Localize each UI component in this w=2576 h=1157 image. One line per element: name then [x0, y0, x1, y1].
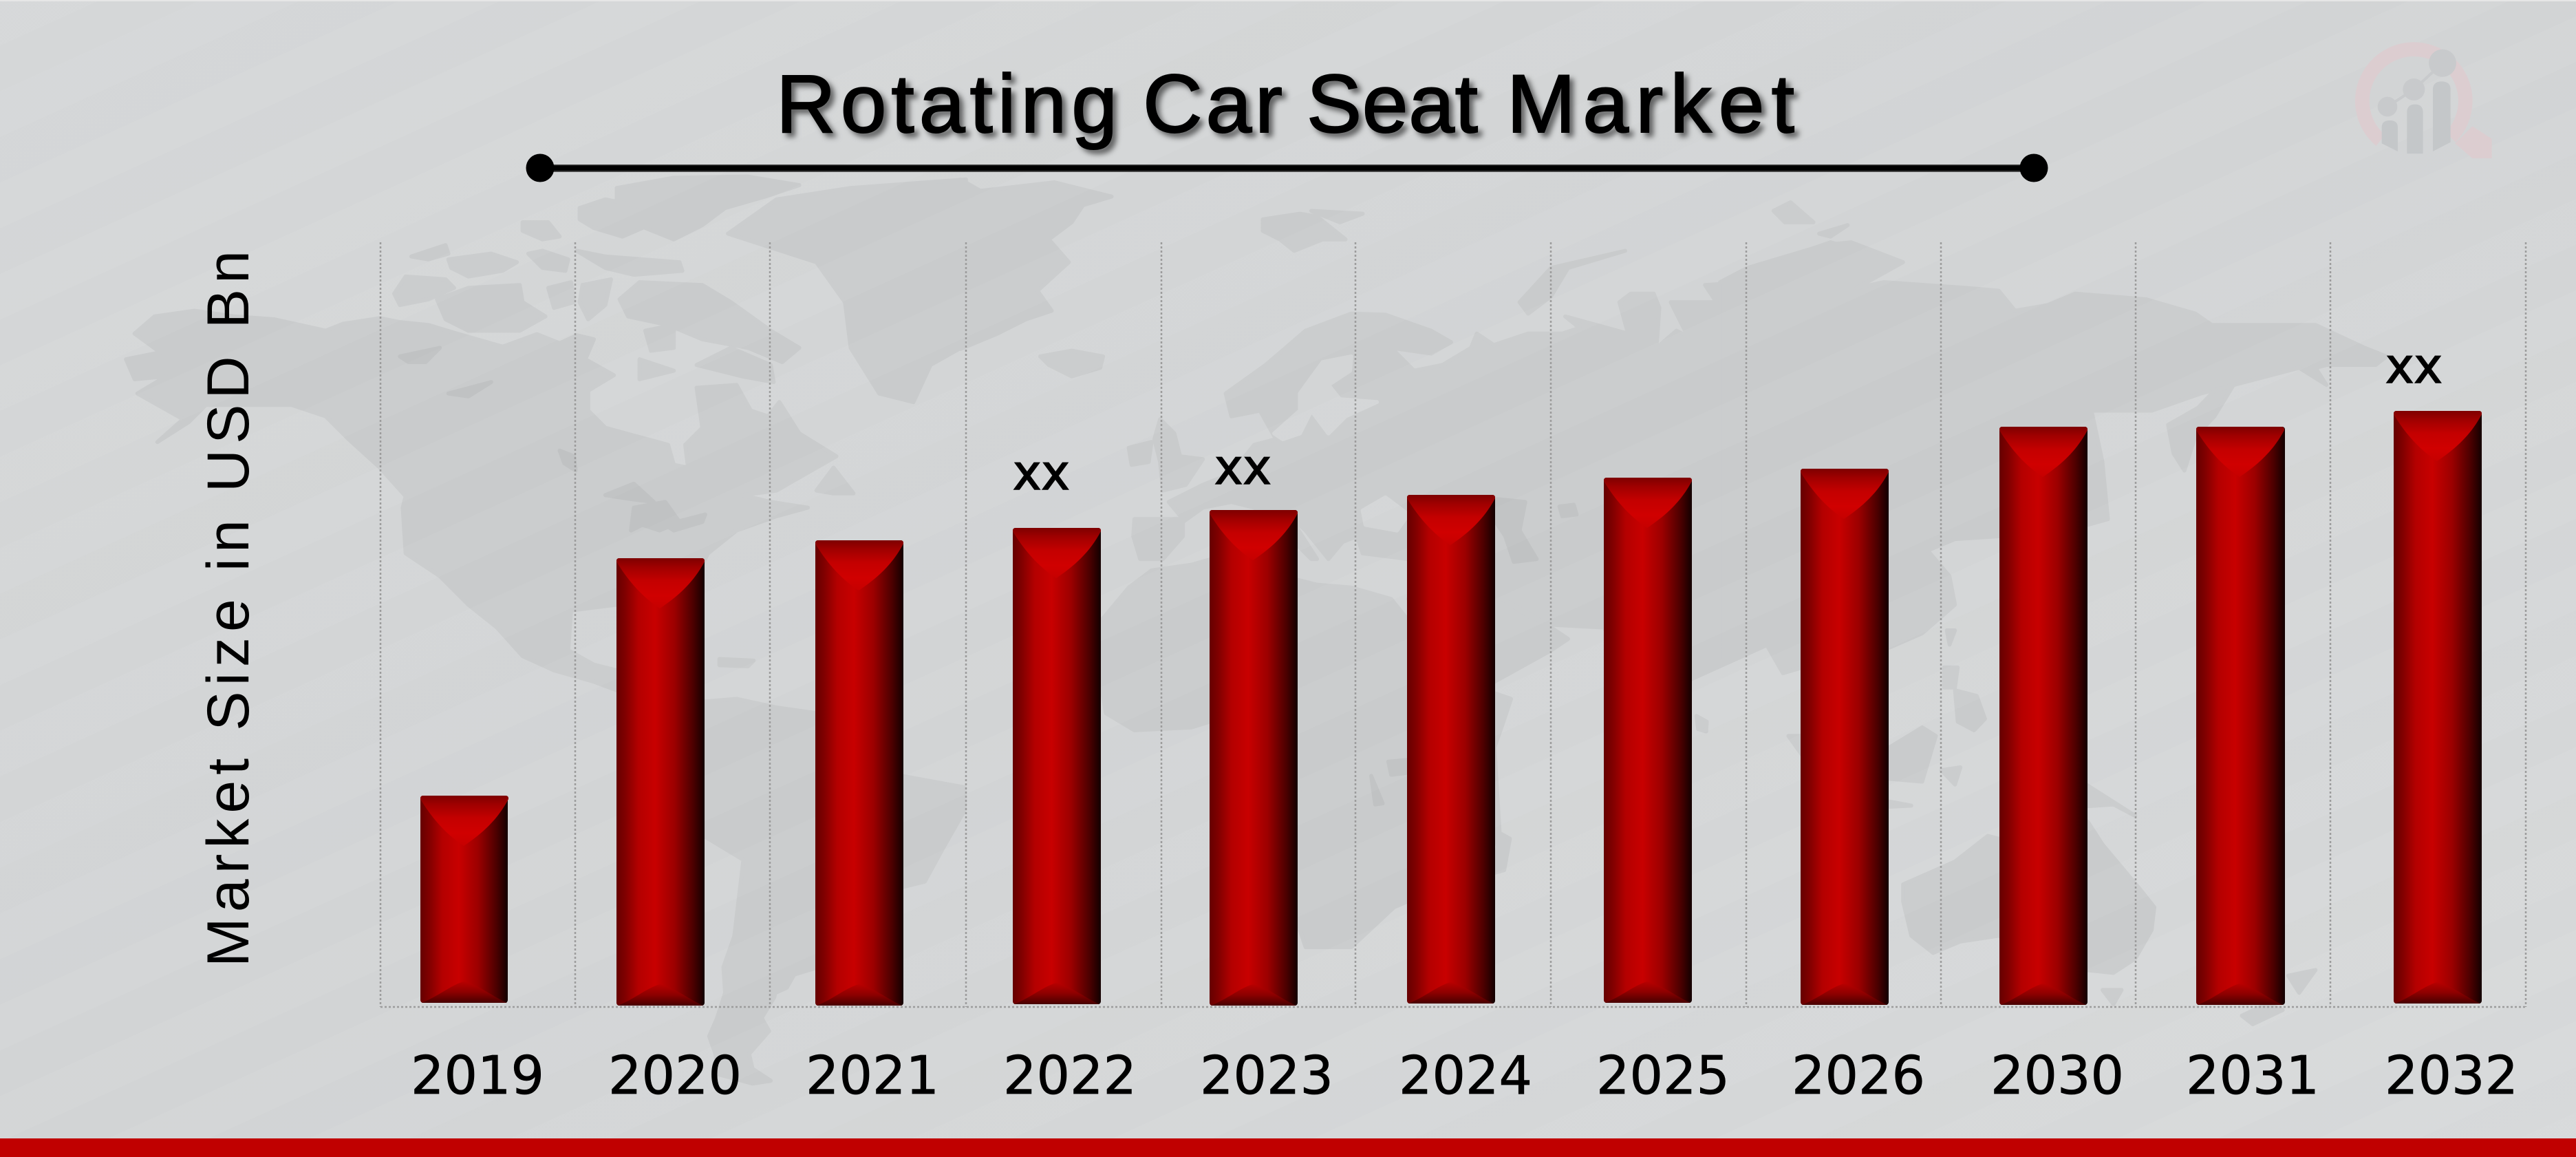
x axis year labels	[411, 1045, 2518, 1107]
value label 2032: xx	[2385, 338, 2443, 394]
bar 2025	[1604, 478, 1692, 1003]
title	[776, 58, 1794, 150]
x axis year labels: 2022	[1003, 1045, 1137, 1107]
title: Seat	[1307, 58, 1478, 150]
top edge	[0, 0, 2576, 1]
bar 2020	[616, 558, 705, 1006]
x axis year labels: 2025	[1596, 1045, 1730, 1107]
y axis label: Market Size in USD Bn	[195, 251, 261, 967]
bar 2021	[815, 540, 903, 1006]
bar 2026	[1801, 469, 1889, 1005]
title rule with end dots	[526, 154, 2048, 182]
x axis year labels: 2023	[1200, 1045, 1333, 1107]
gridlines and baseline	[380, 242, 2526, 1007]
map: Americas and Arctic islands	[126, 177, 966, 1083]
x axis year labels: 2024	[1399, 1045, 1532, 1107]
value label 2023: xx	[1214, 439, 1271, 496]
world map watermark	[126, 177, 2387, 1083]
x axis year labels: 2026	[1792, 1045, 1925, 1107]
x axis year labels: 2020	[608, 1045, 742, 1107]
bar 2023	[1210, 510, 1298, 1006]
title: Car	[1143, 58, 1282, 150]
bar 2031	[2196, 427, 2285, 1005]
x axis year labels: 2032	[2385, 1045, 2518, 1107]
x axis year labels: 2030	[1990, 1045, 2124, 1107]
title: Market	[1507, 58, 1794, 150]
bar 2022	[1013, 528, 1101, 1004]
bar 2030	[1999, 427, 2087, 1005]
x axis year labels: 2019	[411, 1045, 544, 1107]
chart	[380, 242, 2526, 1107]
x axis year labels: 2021	[806, 1045, 939, 1107]
bar 2019	[420, 796, 508, 1003]
map: Greenland, Europe, Africa, West Asia	[960, 180, 1858, 947]
bar 2024	[1407, 495, 1495, 1004]
icon: logo watermark	[2362, 50, 2492, 158]
bar 2032	[2394, 411, 2482, 1004]
title: Rotating	[776, 58, 1117, 150]
map: East Asia, Indonesia, Australia	[1720, 242, 2387, 1024]
value label 2022: xx	[1013, 445, 1070, 501]
x axis year labels: 2031	[2186, 1045, 2319, 1107]
bottom red band	[0, 1138, 2576, 1157]
